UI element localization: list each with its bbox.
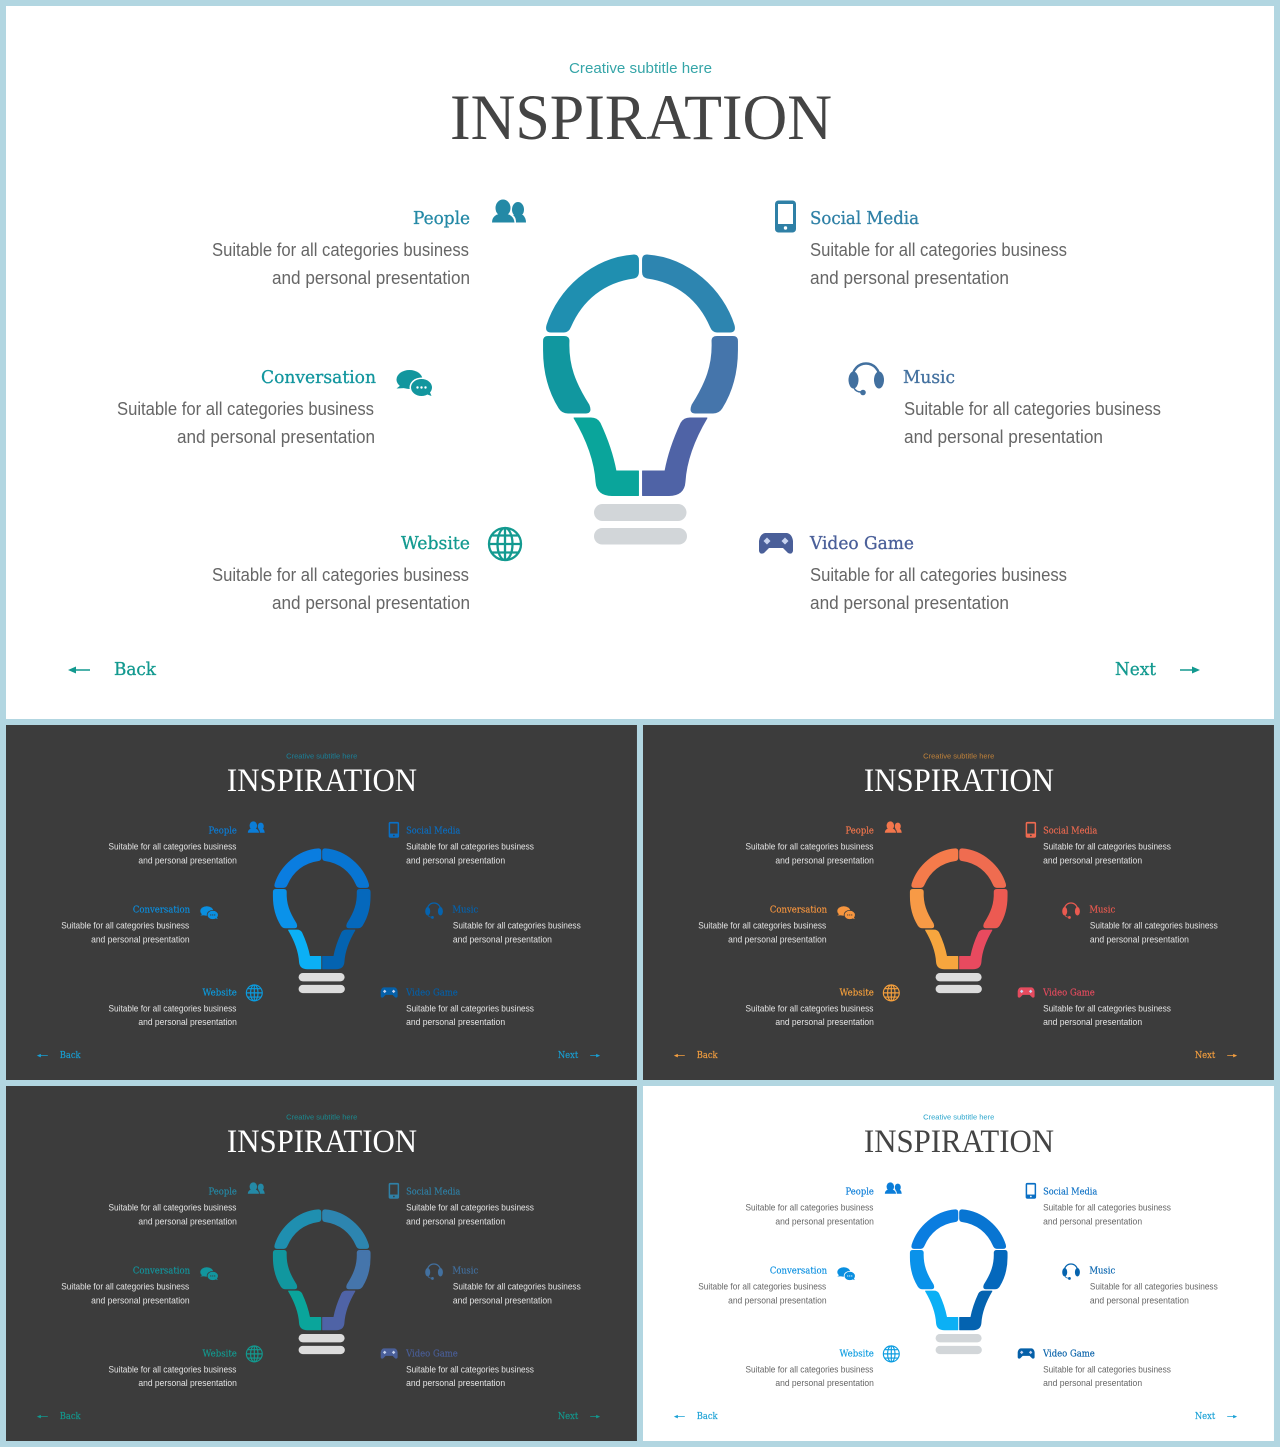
panel: dark orange slide bbox=[643, 725, 1274, 1080]
item: Social Media: and personal presentation bbox=[1043, 855, 1142, 865]
item: Social Media: and personal presentation bbox=[406, 855, 505, 865]
item: Social Media bbox=[775, 200, 1067, 288]
item: Music: Suitable for all categories business bbox=[904, 399, 1161, 419]
panel: dark blue slide bbox=[6, 725, 637, 1080]
item: Website: Website bbox=[203, 1349, 237, 1359]
item: Conversation bbox=[698, 906, 856, 945]
back link with arrow bbox=[68, 659, 157, 680]
item: Social Media bbox=[389, 1183, 534, 1226]
item: Conversation: Suitable for all categories business bbox=[61, 921, 190, 931]
item: Social Media: Suitable for all categories business bbox=[1043, 1202, 1171, 1212]
next link with arrow bbox=[1195, 1412, 1237, 1422]
title: INSPIRATION bbox=[227, 1123, 417, 1159]
item: Music: and personal presentation bbox=[453, 1296, 552, 1306]
item: Video Game: Video Game bbox=[405, 988, 458, 998]
item: People: People bbox=[209, 827, 237, 837]
item: Website bbox=[746, 1346, 899, 1388]
next link with arrow bbox=[558, 1051, 600, 1061]
item: Video Game: and personal presentation bbox=[810, 593, 1009, 613]
subtitle: Creative subtitle here bbox=[923, 1112, 994, 1121]
item: Video Game: and personal presentation bbox=[1043, 1017, 1142, 1027]
item: Website: Suitable for all categories business bbox=[746, 1003, 874, 1013]
item: Conversation bbox=[61, 906, 219, 945]
item: People: and personal presentation bbox=[775, 855, 874, 865]
item: Conversation: and personal presentation bbox=[728, 1296, 827, 1306]
item: Music bbox=[425, 903, 581, 945]
item: Social Media bbox=[1026, 1183, 1171, 1226]
panel: light blue slide bbox=[643, 1086, 1274, 1441]
item: Website: Website bbox=[203, 988, 237, 998]
item: Website: and personal presentation bbox=[775, 1378, 874, 1388]
subtitle: Creative subtitle here bbox=[923, 751, 994, 760]
next link with arrow: Next bbox=[558, 1412, 579, 1422]
item: People bbox=[212, 200, 526, 288]
subtitle: Creative subtitle here bbox=[286, 751, 357, 760]
item: Website: Website bbox=[401, 533, 470, 554]
item: Website: Website bbox=[840, 1349, 874, 1359]
item: Video Game: Video Game bbox=[1042, 988, 1095, 998]
light bulb diagram bbox=[910, 849, 1007, 993]
item: Website: Suitable for all categories business bbox=[109, 1364, 237, 1374]
item: Video Game: Suitable for all categories business bbox=[406, 1003, 534, 1013]
item: Conversation: Suitable for all categories business bbox=[61, 1282, 190, 1292]
item: Conversation: and personal presentation bbox=[177, 427, 375, 447]
item: Video Game bbox=[381, 1348, 534, 1388]
item: Social Media: Social Media bbox=[406, 1188, 461, 1198]
item: Conversation: and personal presentation bbox=[91, 1296, 190, 1306]
item: People: and personal presentation bbox=[775, 1216, 874, 1226]
item: Music bbox=[848, 364, 1161, 447]
item: Music: and personal presentation bbox=[1090, 1296, 1189, 1306]
light bulb diagram bbox=[273, 1210, 370, 1354]
item: Video Game: Video Game bbox=[809, 533, 914, 554]
item: Video Game bbox=[759, 533, 1067, 613]
item: Music: Music bbox=[452, 906, 478, 916]
item: Music: Suitable for all categories business bbox=[453, 921, 581, 931]
item: Website: and personal presentation bbox=[138, 1017, 237, 1027]
item: Conversation: Suitable for all categories business bbox=[698, 921, 827, 931]
item: People bbox=[746, 1182, 902, 1226]
item: Website bbox=[746, 985, 899, 1027]
subtitle: Creative subtitle here bbox=[569, 60, 712, 77]
item: Social Media: Social Media bbox=[1043, 827, 1098, 837]
item: Website bbox=[109, 1346, 262, 1388]
subtitle: Creative subtitle here bbox=[286, 1112, 357, 1121]
item: Website bbox=[109, 985, 262, 1027]
title: INSPIRATION bbox=[864, 762, 1054, 798]
item: Website: and personal presentation bbox=[775, 1017, 874, 1027]
next link with arrow: Next bbox=[1195, 1412, 1216, 1422]
item: People: and personal presentation bbox=[138, 855, 237, 865]
back link with arrow bbox=[674, 1412, 718, 1422]
item: Video Game: and personal presentation bbox=[406, 1378, 505, 1388]
panel: main light slide bbox=[6, 6, 1274, 719]
item: Website: Suitable for all categories business bbox=[212, 565, 469, 585]
item: Conversation: Conversation bbox=[770, 1267, 827, 1277]
light bulb diagram bbox=[273, 849, 370, 993]
back link with arrow: Back bbox=[697, 1412, 718, 1422]
item: People: People bbox=[209, 1188, 237, 1198]
item: Video Game: Suitable for all categories business bbox=[1043, 1364, 1171, 1374]
item: Social Media: and personal presentation bbox=[810, 268, 1009, 288]
panel: dark teal slide bbox=[6, 1086, 637, 1441]
item: Conversation: Conversation bbox=[770, 906, 827, 916]
item: Music: Suitable for all categories business bbox=[453, 1282, 581, 1292]
item: People: Suitable for all categories business bbox=[746, 841, 874, 851]
item: Video Game: Suitable for all categories business bbox=[810, 565, 1067, 585]
item: Social Media: Suitable for all categories business bbox=[406, 841, 534, 851]
title: INSPIRATION bbox=[227, 762, 417, 798]
item: Website: Suitable for all categories business bbox=[109, 1003, 237, 1013]
next link with arrow: Next bbox=[1115, 659, 1157, 680]
item: Music bbox=[1062, 1264, 1218, 1306]
item: Video Game: Video Game bbox=[1042, 1349, 1095, 1359]
item: People: Suitable for all categories business bbox=[109, 1202, 237, 1212]
item: Social Media: and personal presentation bbox=[1043, 1216, 1142, 1226]
item: Social Media bbox=[389, 822, 534, 865]
item: Social Media: Suitable for all categories business bbox=[406, 1202, 534, 1212]
item: People: and personal presentation bbox=[272, 268, 470, 288]
item: Conversation bbox=[698, 1267, 856, 1306]
title: INSPIRATION bbox=[450, 82, 832, 154]
item: Music: Music bbox=[1089, 906, 1115, 916]
item: Video Game bbox=[381, 987, 534, 1027]
item: Conversation: Conversation bbox=[133, 906, 190, 916]
item: People bbox=[109, 1182, 265, 1226]
item: Music: Music bbox=[903, 367, 955, 388]
item: People bbox=[109, 821, 265, 865]
item: Music: Suitable for all categories business bbox=[1090, 1282, 1218, 1292]
next link with arrow: Next bbox=[1195, 1051, 1216, 1061]
back link with arrow: Back bbox=[697, 1051, 718, 1061]
light bulb diagram bbox=[910, 1210, 1007, 1354]
item: Video Game: and personal presentation bbox=[406, 1017, 505, 1027]
item: Social Media: Social Media bbox=[406, 827, 461, 837]
item: Music: and personal presentation bbox=[904, 427, 1103, 447]
back link with arrow bbox=[37, 1412, 81, 1422]
item: Video Game bbox=[1018, 987, 1171, 1027]
item: People bbox=[746, 821, 902, 865]
item: Music: and personal presentation bbox=[1090, 935, 1189, 945]
item: Conversation: and personal presentation bbox=[91, 935, 190, 945]
item: Conversation: Suitable for all categories business bbox=[117, 399, 374, 419]
item: People: Suitable for all categories business bbox=[109, 841, 237, 851]
item: Website: and personal presentation bbox=[138, 1378, 237, 1388]
item: Music: and personal presentation bbox=[453, 935, 552, 945]
item: Conversation bbox=[61, 1267, 219, 1306]
item: Music: Music bbox=[452, 1267, 478, 1277]
item: Website: Suitable for all categories business bbox=[746, 1364, 874, 1374]
item: People: Suitable for all categories business bbox=[212, 240, 469, 260]
item: People: Suitable for all categories business bbox=[746, 1202, 874, 1212]
back link with arrow bbox=[674, 1051, 718, 1061]
title: INSPIRATION bbox=[864, 1123, 1054, 1159]
item: Social Media: Suitable for all categories business bbox=[810, 240, 1067, 260]
item: Conversation: Conversation bbox=[261, 367, 376, 388]
item: Video Game: Suitable for all categories business bbox=[406, 1364, 534, 1374]
item: Music bbox=[1062, 903, 1218, 945]
item: Website bbox=[212, 528, 521, 613]
item: Video Game: Suitable for all categories business bbox=[1043, 1003, 1171, 1013]
item: Social Media: and personal presentation bbox=[406, 1216, 505, 1226]
back link with arrow: Back bbox=[60, 1051, 81, 1061]
item: Conversation: and personal presentation bbox=[728, 935, 827, 945]
item: Video Game: Video Game bbox=[405, 1349, 458, 1359]
item: People: and personal presentation bbox=[138, 1216, 237, 1226]
back link with arrow: Back bbox=[60, 1412, 81, 1422]
item: Conversation: Conversation bbox=[133, 1267, 190, 1277]
item: People: People bbox=[846, 827, 874, 837]
item: Music bbox=[425, 1264, 581, 1306]
item: Social Media: Social Media bbox=[1043, 1188, 1098, 1198]
item: Music: Music bbox=[1089, 1267, 1115, 1277]
item: People: People bbox=[413, 208, 470, 229]
item: Conversation: Suitable for all categories business bbox=[698, 1282, 827, 1292]
light bulb diagram bbox=[544, 255, 738, 544]
item: Social Media: Suitable for all categories business bbox=[1043, 841, 1171, 851]
item: Social Media bbox=[1026, 822, 1171, 865]
item: Music: Suitable for all categories business bbox=[1090, 921, 1218, 931]
item: Video Game: and personal presentation bbox=[1043, 1378, 1142, 1388]
back link with arrow bbox=[37, 1051, 81, 1061]
next link with arrow bbox=[1195, 1051, 1237, 1061]
item: Social Media: Social Media bbox=[810, 208, 919, 229]
item: Video Game bbox=[1018, 1348, 1171, 1388]
item: Website: and personal presentation bbox=[272, 593, 470, 613]
item: Conversation bbox=[117, 367, 434, 447]
item: Website: Website bbox=[840, 988, 874, 998]
next link with arrow bbox=[1115, 659, 1200, 680]
next link with arrow bbox=[558, 1412, 600, 1422]
item: People: People bbox=[846, 1188, 874, 1198]
back link with arrow: Back bbox=[114, 659, 157, 680]
next link with arrow: Next bbox=[558, 1051, 579, 1061]
